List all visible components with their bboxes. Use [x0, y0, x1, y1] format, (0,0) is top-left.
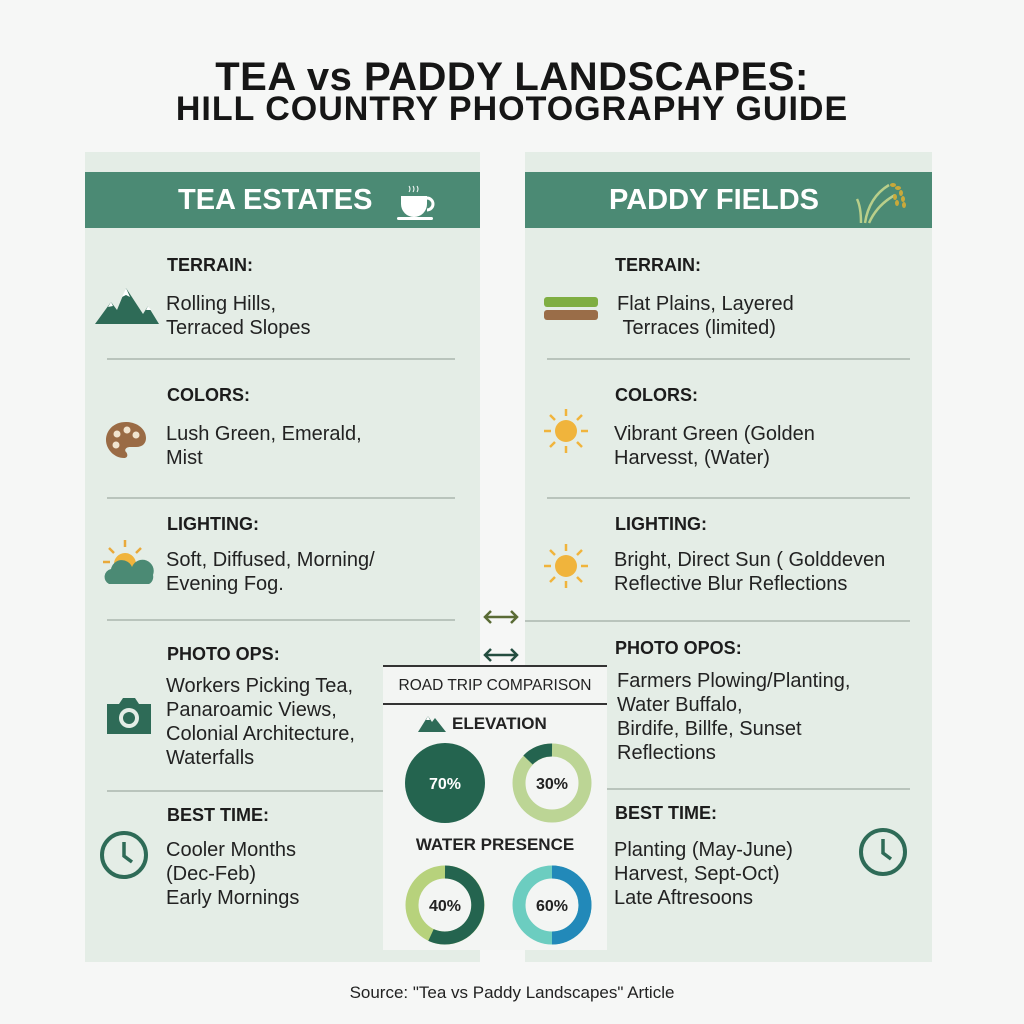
header: paddy fields: [525, 172, 932, 228]
chart: water donuts: 40%: [429, 898, 461, 915]
chart: elevation donuts: [405, 743, 592, 823]
panel: tea estates: Mist: [166, 447, 203, 469]
icon: tea cup: [397, 186, 434, 220]
panel: paddy fields: COLORS:: [615, 385, 698, 405]
chart: elevation donuts: 70%: [429, 776, 461, 793]
panel: paddy fields: Late Aftresoons: [614, 887, 753, 909]
panel: paddy fields: Reflections: [617, 742, 716, 764]
panel: road trip comparison: [383, 665, 607, 950]
arrow: bottom: [483, 648, 519, 662]
panel: tea estates: Panaroamic Views,: [166, 699, 337, 721]
icon: palette: [106, 422, 146, 458]
title: TEA vs PADDY LANDSCAPES:: [215, 55, 809, 99]
icon: clock: [859, 828, 907, 876]
source: Source: "Tea vs Paddy Landscapes" Article: [350, 983, 674, 1002]
panel: paddy fields: BEST TIME:: [615, 803, 717, 823]
panel: tea estates: COLORS:: [167, 385, 250, 405]
panel: paddy fields: Reflective Blur Reflections: [614, 573, 847, 595]
title: HILL COUNTRY PHOTOGRAPHY GUIDE: [176, 90, 848, 128]
icon: sun: [544, 544, 588, 588]
panel: paddy fields: Harvest, Sept-Oct): [614, 863, 780, 885]
panel: tea estates: [85, 152, 480, 962]
panel: paddy fields: Flat Plains, Layered: [617, 293, 794, 315]
icon: rice stalk: [856, 183, 906, 224]
panel: tea estates: BEST TIME:: [167, 805, 269, 825]
header: tea estates: [85, 172, 480, 228]
panel: paddy fields: Birdife, Billfe, Sunset: [617, 718, 802, 740]
panel: paddy fields: Terraces (limited): [623, 317, 776, 339]
panel: paddy fields: Harvesst, (Water): [614, 447, 770, 469]
panel: paddy fields: Vibrant Green (Golden: [614, 423, 815, 445]
panel: paddy fields: [525, 152, 932, 962]
heading: elevation: ELEVATION: [452, 714, 547, 733]
panel: paddy fields: LIGHTING:: [615, 514, 707, 534]
panel: tea estates: Cooler Months: [166, 839, 296, 861]
panel: tea estates: Evening Fog.: [166, 573, 284, 595]
icon: sun cloud: [103, 540, 154, 584]
arrow: top: [483, 610, 519, 624]
chart: water donuts: 60%: [536, 898, 568, 915]
panel: tea estates: (Dec-Feb): [166, 863, 256, 885]
panel: paddy fields: Water Buffalo,: [617, 694, 743, 716]
panel: paddy fields: Planting (May-June): [614, 839, 793, 861]
panel: tea estates: Soft, Diffused, Morning/: [166, 549, 375, 571]
panel: paddy fields: TERRAIN:: [615, 255, 701, 275]
icon: mountain: [95, 288, 159, 324]
icon: layered fields: [544, 297, 598, 320]
panel: tea estates: Lush Green, Emerald,: [166, 423, 362, 445]
panel: paddy fields: Farmers Plowing/Planting,: [617, 670, 850, 692]
header: tea estates: TEA ESTATES: [178, 184, 372, 216]
panel: tea estates: Workers Picking Tea,: [166, 675, 353, 697]
title: [176, 55, 848, 128]
panel: paddy fields: PHOTO OPOS:: [615, 638, 742, 658]
chart: elevation donuts: 30%: [536, 776, 568, 793]
icon: sun: [544, 409, 588, 453]
panel: tea estates: LIGHTING:: [167, 514, 259, 534]
panel: tea estates: PHOTO OPS:: [167, 644, 280, 664]
panel: tea estates: Rolling Hills,: [166, 293, 276, 315]
icon: clock: [100, 831, 148, 879]
icon: camera: [107, 698, 151, 734]
heading: road trip comparison: ROAD TRIP COMPARISON: [399, 677, 591, 694]
panel: tea estates: Colonial Architecture,: [166, 723, 355, 745]
panel: tea estates: TERRAIN:: [167, 255, 253, 275]
chart: water donuts: [406, 866, 592, 944]
heading: water presence: WATER PRESENCE: [416, 835, 574, 854]
panel: tea estates: Early Mornings: [166, 887, 299, 909]
panel: paddy fields: Bright, Direct Sun ( Golddeven: [614, 549, 885, 571]
header: paddy fields: PADDY FIELDS: [609, 184, 819, 216]
panel: tea estates: Terraced Slopes: [166, 317, 311, 339]
panel: tea estates: Waterfalls: [166, 747, 254, 769]
